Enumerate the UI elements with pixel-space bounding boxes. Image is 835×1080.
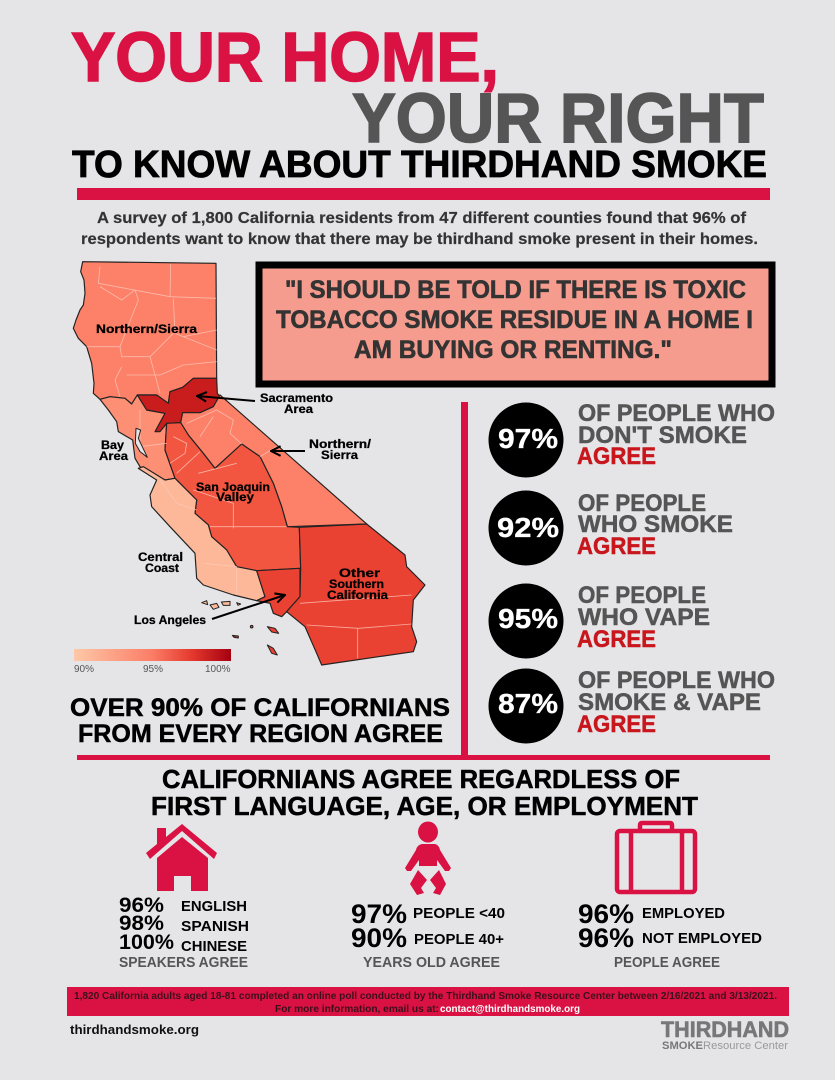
stat: smoke and vape	[488, 667, 775, 744]
logo: THIRDHAND	[661, 1017, 789, 1042]
stat: vapers: 95%	[498, 603, 558, 634]
map labels: San Joaquin	[196, 482, 270, 494]
title: your home: YOUR HOME,	[71, 18, 499, 96]
quote box: TOBACCO SMOKE RESIDUE IN A HOME I	[276, 306, 753, 334]
islands	[202, 601, 241, 609]
age stats: 97%	[351, 899, 407, 929]
map labels: Sacramento	[260, 393, 333, 405]
age stats: YEARS OLD AGREE	[363, 954, 500, 971]
age stats: 90%	[351, 923, 407, 953]
section heading: FIRST LANGUAGE, AGE, OR EMPLOYMENT	[151, 791, 698, 821]
map of California	[73, 262, 425, 665]
region: Other Southern California	[287, 524, 425, 665]
map labels: Northern/	[309, 439, 372, 451]
map labels: Los Angeles	[134, 615, 206, 627]
map heading	[70, 694, 450, 748]
employment stats	[578, 899, 762, 971]
section heading: CALIFORNIANS AGREE REGARDLESS OF	[162, 764, 680, 794]
stat: non-smokers: AGREE	[577, 443, 656, 470]
language stats: ENGLISH	[181, 898, 247, 915]
footer bar: For more information, email us at:	[275, 1004, 439, 1015]
map labels: Sierra	[321, 450, 359, 462]
survey intro text: A survey of 1,800 California residents from 47 different counties found that 96% of	[97, 210, 747, 227]
vertical divider	[461, 402, 468, 760]
region: Northern/Sierra north	[73, 262, 217, 404]
survey intro text	[81, 210, 758, 248]
survey intro text: respondents want to know that there may be thirdhand smoke present in their homes.	[81, 231, 758, 248]
stat: smoke and vape: OF PEOPLE WHO	[578, 667, 775, 694]
section heading	[151, 764, 698, 821]
map labels: Area	[99, 451, 129, 463]
quote box	[259, 265, 772, 384]
stat: non-smokers: OF PEOPLE WHO	[578, 400, 775, 427]
region: Central Coast	[138, 467, 265, 601]
region: Los Angeles	[257, 568, 300, 617]
stat: non-smokers	[488, 400, 775, 478]
employment stats: 96%	[578, 899, 634, 929]
stat: smokers	[488, 490, 733, 566]
quote box: AM BUYING OR RENTING."	[354, 336, 672, 364]
map legend: 100%	[205, 664, 231, 675]
map labels: Other	[339, 568, 381, 580]
title rule	[77, 188, 770, 200]
website: thirdhandsmoke.org	[70, 1022, 199, 1037]
logo: SMOKE	[662, 1040, 703, 1052]
language stats: 98%	[119, 911, 164, 935]
map heading: OVER 90% OF CALIFORNIANS	[70, 694, 450, 722]
horizontal divider	[77, 755, 770, 760]
stat: smokers: 92%	[497, 512, 559, 543]
quote box: "I SHOULD BE TOLD IF THERE IS TOXIC	[285, 276, 746, 304]
map labels: Area	[284, 404, 314, 416]
region: Sacramento Area	[137, 378, 220, 432]
subtitle: TO KNOW ABOUT THIRDHAND SMOKE	[72, 144, 767, 186]
map heading: FROM EVERY REGION AGREE	[78, 720, 443, 748]
map labels: Valley	[216, 492, 255, 504]
language stats: 96%	[119, 893, 164, 917]
map legend: 95%	[143, 664, 163, 675]
footer bar	[67, 987, 789, 1016]
language stats: 100%	[119, 930, 174, 954]
language stats	[119, 893, 249, 971]
map labels	[96, 324, 389, 627]
map legend: 90%	[74, 664, 94, 675]
region: San Joaquin Valley	[165, 423, 301, 571]
language stats: SPEAKERS AGREE	[119, 954, 248, 971]
stat: smokers: WHO SMOKE	[578, 511, 733, 538]
logo: Resource Center	[703, 1040, 788, 1052]
footer bar: contact@thirdhandsmoke.org	[440, 1004, 580, 1015]
map labels: Northern/Sierra	[96, 324, 198, 336]
map arrow: Los Angeles	[212, 595, 285, 619]
map labels: Coast	[145, 563, 179, 575]
map labels: California	[327, 590, 389, 602]
stat: non-smokers: 97%	[498, 423, 558, 454]
icon: house	[146, 824, 217, 891]
stat: smoke and vape: SMOKE & VAPE	[578, 689, 761, 716]
employment stats: NOT EMPLOYED	[642, 930, 762, 947]
stat: vapers: WHO VAPE	[578, 604, 710, 631]
stat: smokers: OF PEOPLE	[578, 490, 706, 517]
title: your right: YOUR RIGHT	[352, 79, 764, 157]
employment stats: EMPLOYED	[642, 905, 725, 922]
region: Bay Area	[100, 395, 175, 480]
age stats: PEOPLE 40+	[414, 931, 504, 948]
map labels: Bay	[101, 440, 125, 452]
map legend	[74, 649, 231, 675]
language stats: SPANISH	[181, 918, 249, 935]
employment stats: PEOPLE AGREE	[614, 954, 720, 971]
map arrow: Northern/Sierra	[271, 450, 305, 452]
stat: vapers: OF PEOPLE	[578, 582, 706, 609]
map arrow: Sacramento	[197, 396, 255, 401]
map labels: Southern	[329, 579, 384, 591]
icon: briefcase	[617, 823, 695, 892]
icon: baby	[405, 822, 451, 895]
map labels: Central	[138, 552, 183, 564]
footer bar: 1,820 California adults aged 18-81 completed an online poll conducted by the Thirdhand Smoke Resource Center between 2/16/2021 and 3/13/2021.	[74, 991, 777, 1002]
language stats: CHINESE	[181, 938, 247, 955]
stat: smokers: AGREE	[577, 533, 656, 560]
age stats: PEOPLE <40	[413, 905, 505, 922]
stat: non-smokers: DON'T SMOKE	[578, 422, 747, 449]
stat: smoke and vape: 87%	[498, 688, 558, 719]
region: Northern/Sierra east	[181, 395, 367, 527]
age stats	[351, 899, 505, 971]
stat: vapers: AGREE	[577, 626, 656, 653]
stat: smoke and vape: AGREE	[577, 711, 656, 738]
employment stats: 96%	[578, 923, 634, 953]
stat: vapers	[488, 582, 710, 658]
bay	[135, 428, 147, 457]
